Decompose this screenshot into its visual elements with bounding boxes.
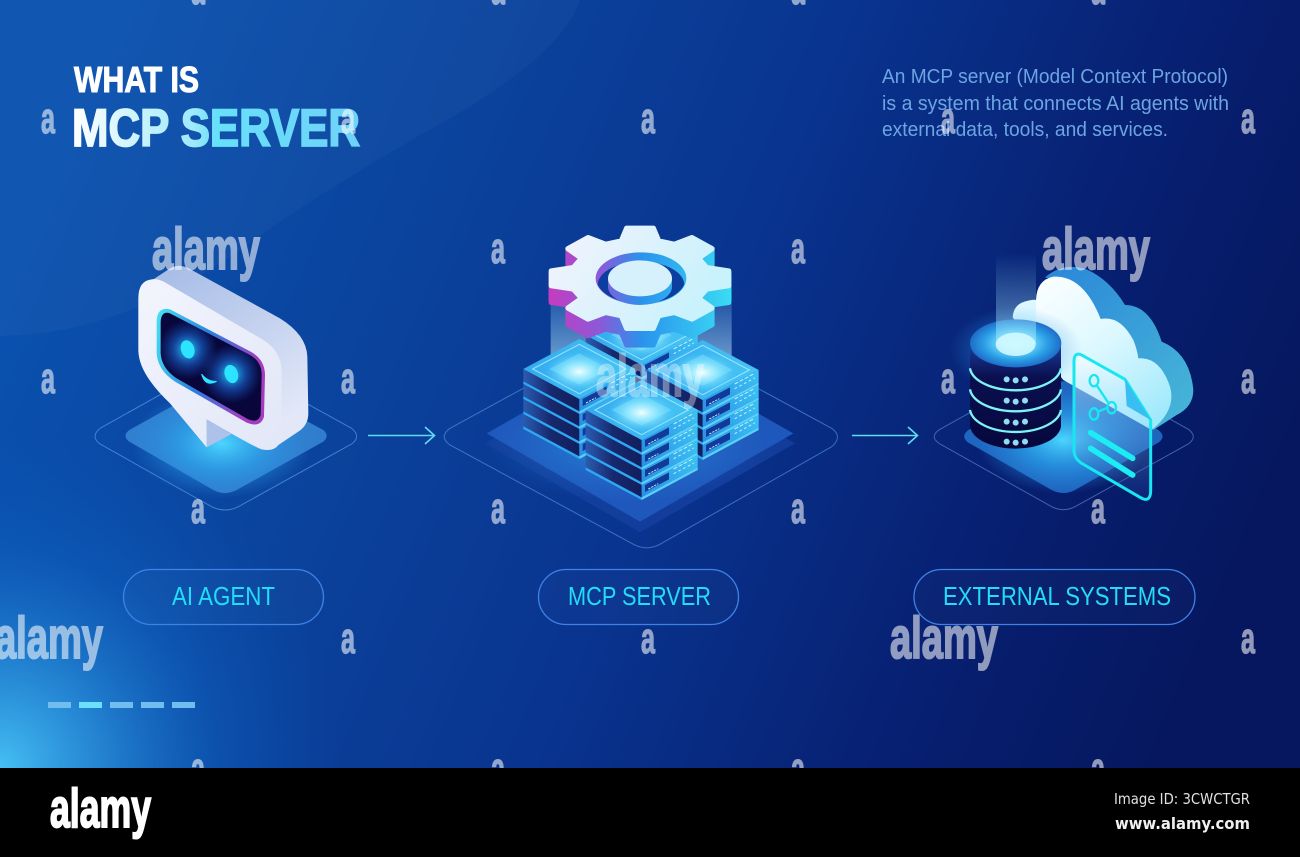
light beam: [551, 278, 732, 375]
watermark: small tiled marks: a: [1241, 614, 1255, 663]
watermark: small tiled marks: a: [191, 484, 205, 533]
icon: document: [1074, 354, 1151, 499]
description text: An MCP server (Model Context Protocol): [882, 65, 1228, 88]
watermark: small tiled marks: a: [491, 484, 505, 533]
progress dashes: [48, 702, 195, 708]
watermark: small tiled marks: a: [941, 354, 955, 403]
platform: MCP server: [444, 328, 837, 548]
watermark: large marks: alamy: [152, 217, 260, 282]
watermark: small tiled marks: a: [791, 224, 805, 273]
watermark: small tiled marks: a: [341, 614, 355, 663]
description text: is a system that connects AI agents with: [882, 92, 1229, 115]
watermark: small tiled marks: a: [341, 94, 355, 143]
watermark: small tiled marks: a: [791, 744, 805, 793]
heading: what is: WHAT IS: [74, 59, 199, 100]
watermark: small tiled marks: a: [341, 354, 355, 403]
footer url: www.alamy.com: [1115, 814, 1250, 833]
watermark: small tiled marks: a: [941, 94, 955, 143]
watermark: large marks: [0, 217, 1150, 671]
illustration: MCP server: [444, 228, 837, 548]
server racks: [523, 305, 759, 500]
watermark: small tiled marks: a: [491, 224, 505, 273]
description text: external data, tools, and services.: [882, 118, 1168, 141]
watermark: small tiled marks: a: [1091, 744, 1105, 793]
arrow 2: [852, 427, 918, 444]
watermark: small tiled marks: a: [791, 484, 805, 533]
label: external systems: [914, 570, 1195, 624]
platform: external systems: [934, 363, 1193, 510]
illustration: external systems: [934, 253, 1193, 510]
footer band: [0, 768, 1300, 857]
watermark: small tiled marks: a: [41, 354, 55, 403]
icon: database: [949, 253, 1082, 449]
icon: gear: [551, 228, 729, 345]
watermark: small tiled marks: a: [1241, 354, 1255, 403]
watermark: small tiled marks: a: [641, 614, 655, 663]
label: MCP server: MCP SERVER: [568, 581, 711, 611]
icon: cloud: [1013, 267, 1193, 430]
illustration: AI agent: [95, 266, 357, 510]
title: [72, 59, 360, 158]
watermark: small tiled marks: a: [641, 94, 655, 143]
label: external systems: EXTERNAL SYSTEMS: [943, 581, 1171, 611]
watermark: small tiled marks: a: [191, 744, 205, 793]
label: AI agent: [124, 570, 324, 624]
watermark: large marks: alamy: [596, 344, 704, 409]
label: AI agent: AI AGENT: [172, 581, 275, 611]
platform: AI agent: [95, 362, 357, 510]
watermark: large marks: alamy: [1042, 217, 1150, 282]
watermark: small tiled marks: a: [41, 94, 55, 143]
footer image id: Image ID: 3CWCTGR: [1114, 790, 1250, 808]
watermark: small tiled marks: a: [1241, 94, 1255, 143]
heading: mcp server: MCP SERVER: [72, 99, 360, 158]
watermark: small tiled marks: a: [1091, 484, 1105, 533]
watermark: small tiled marks: a: [491, 744, 505, 793]
label: MCP server: [538, 570, 738, 624]
icon: robot chat bubble: [138, 266, 308, 450]
arrow 1: [368, 427, 434, 444]
watermark: large marks: alamy: [890, 606, 998, 671]
description text: [882, 65, 1229, 141]
footer logo: alamy: [50, 777, 151, 839]
